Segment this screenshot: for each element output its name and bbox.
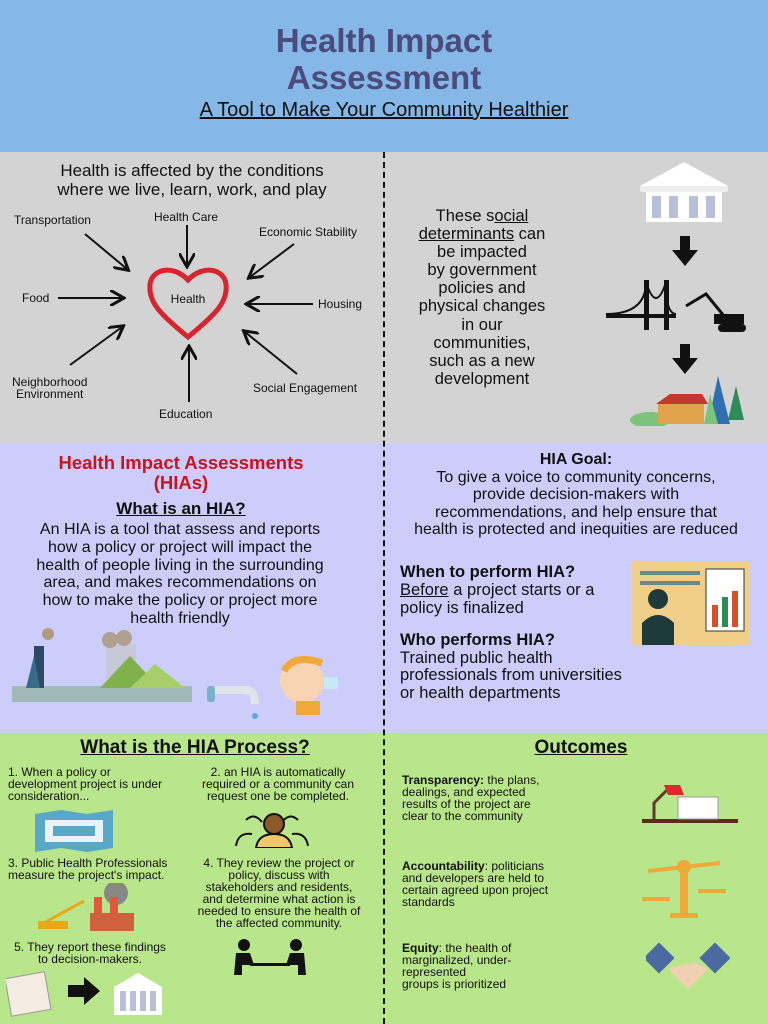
panel: what is HIA bbox=[0, 443, 768, 733]
text: who performs: Trained public health bbox=[400, 648, 553, 666]
arrow down 1 bbox=[672, 236, 698, 266]
text: HIA definition: how to make the policy or project more bbox=[43, 592, 317, 609]
text: social determinants: such as a new bbox=[429, 352, 535, 370]
text: HIA definition: area, and makes recommendations on bbox=[43, 574, 317, 591]
panel: social determinants bbox=[0, 152, 768, 443]
title: Health Impact bbox=[276, 22, 492, 59]
diagram: determinants around heart: Education bbox=[159, 407, 212, 421]
diagram: determinants around heart: Housing bbox=[318, 297, 362, 311]
text: HIA definition: An HIA is a tool that assess and reports bbox=[40, 521, 320, 538]
heading: outcomes: Outcomes bbox=[535, 737, 627, 758]
step 3 bbox=[8, 856, 167, 882]
diagram: determinants around heart: Economic Stability bbox=[259, 225, 357, 239]
outcome: transparency: Transparency: the plans, bbox=[402, 773, 539, 787]
text: HIA definition bbox=[36, 521, 324, 627]
icon: community group bbox=[235, 813, 309, 848]
outcome: accountability: certain agreed upon project bbox=[402, 883, 548, 897]
step 4: the affected community. bbox=[216, 916, 342, 930]
step 4: policy, discuss with bbox=[228, 868, 330, 882]
text: who performs: Who performs HIA? bbox=[400, 631, 555, 649]
heading: HIA goal: provide decision-makers with bbox=[473, 486, 679, 503]
step 1: 1. When a policy or bbox=[8, 765, 111, 779]
icon: faucet bbox=[207, 686, 259, 719]
text: social determinants: be impacted bbox=[437, 243, 527, 261]
heading: health affected bbox=[57, 161, 327, 199]
heading: health affected: where we live, learn, work, and play bbox=[57, 180, 327, 199]
outcome: accountability: and developers are held to bbox=[402, 871, 544, 885]
icon: presenter with chart bbox=[632, 561, 750, 645]
heading: HIAs bbox=[58, 452, 304, 493]
diagram: determinants around heart bbox=[12, 210, 362, 421]
step 3: 3. Public Health Professionals bbox=[8, 856, 167, 870]
text: social determinants: determinants can bbox=[419, 225, 545, 243]
step 1: development project is under bbox=[8, 777, 162, 791]
outcome: transparency bbox=[402, 773, 539, 823]
text: when to perform bbox=[400, 563, 594, 617]
outcome: equity: groups is prioritized bbox=[402, 977, 506, 991]
diagram: determinants around heart: Environment bbox=[16, 387, 84, 401]
text: social determinants bbox=[418, 207, 545, 388]
heading: HIA goal: recommendations, and help ensure that bbox=[435, 504, 717, 520]
step 4: needed to ensure the health of bbox=[198, 904, 360, 918]
icon: report arrow building bbox=[6, 971, 162, 1017]
step 2 bbox=[202, 765, 354, 803]
icon: house and trees bbox=[630, 376, 744, 426]
step 5: to decision-makers. bbox=[38, 952, 142, 966]
icon: scales bbox=[642, 860, 726, 918]
diagram: determinants around heart: Health bbox=[171, 292, 205, 306]
step 1: consideration... bbox=[8, 789, 89, 803]
icon: meeting bbox=[234, 939, 306, 975]
text: HIA definition: how a policy or project will impact the bbox=[48, 539, 312, 556]
icon: polluted landscape bbox=[12, 628, 192, 702]
outcome: equity: Equity: the health of bbox=[402, 941, 511, 955]
heading: HIA goal: health is protected and inequities are reduced bbox=[414, 521, 738, 538]
diagram: determinants around heart: Food bbox=[22, 291, 49, 305]
step 3: measure the project's impact. bbox=[8, 868, 164, 882]
outcome: transparency: results of the project are bbox=[402, 797, 531, 811]
subtitle: A Tool to Make Your Community Healthier bbox=[200, 99, 568, 121]
text: when to perform: policy is finalized bbox=[400, 599, 524, 617]
step 4: 4. They review the project or bbox=[203, 856, 355, 870]
step 4: and determine what action is bbox=[203, 892, 355, 906]
step 2: 2. an HIA is automatically bbox=[211, 765, 345, 779]
diagram: determinants around heart: Social Engagement bbox=[253, 381, 358, 395]
text: who performs: professionals from universities bbox=[400, 666, 622, 684]
heading: HIAs: Health Impact Assessments bbox=[58, 452, 304, 473]
heading: HIAs: (HIAs) bbox=[154, 472, 208, 493]
title bbox=[276, 22, 492, 96]
header band bbox=[0, 0, 768, 152]
outcome: accountability: standards bbox=[402, 895, 455, 909]
step 5 bbox=[14, 940, 166, 966]
outcome: accountability: Accountability: politicians bbox=[402, 859, 544, 873]
title: Assessment bbox=[287, 59, 481, 96]
arrow down 2 bbox=[672, 344, 698, 374]
outcome: transparency: dealings, and expected bbox=[402, 785, 525, 799]
icon: handshake bbox=[646, 943, 730, 989]
text: social determinants: These social bbox=[436, 207, 528, 225]
text: who performs bbox=[400, 631, 622, 702]
heading: health affected: Health is affected by the conditions bbox=[60, 161, 324, 180]
heading: HIA goal: To give a voice to community concerns, bbox=[436, 468, 716, 486]
outcome: equity: marginalized, under- bbox=[402, 953, 511, 967]
step 4: stakeholders and residents, bbox=[206, 880, 352, 894]
outcome: transparency: clear to the community bbox=[402, 809, 523, 823]
text: HIA definition: health friendly bbox=[130, 610, 230, 627]
icon: government building bbox=[640, 162, 728, 222]
outcome: equity bbox=[402, 941, 512, 991]
outcome: equity: represented bbox=[402, 965, 466, 979]
diagram: determinants around heart: Neighborhood bbox=[12, 375, 87, 389]
step 4 bbox=[198, 856, 360, 930]
diagram: determinants around heart: Transportation bbox=[14, 213, 91, 227]
text: when to perform: When to perform HIA? bbox=[400, 563, 575, 581]
icon: lamp and laptop bbox=[642, 785, 738, 823]
text: social determinants: physical changes bbox=[419, 297, 545, 315]
step 2: request one be completed. bbox=[207, 789, 349, 803]
outcome: accountability bbox=[402, 859, 548, 909]
icon: bridge and excavator bbox=[606, 280, 746, 332]
step 5: 5. They report these findings bbox=[14, 940, 166, 954]
icon: map bbox=[35, 810, 113, 852]
heading: HIA goal: HIA Goal: bbox=[540, 451, 612, 468]
text: who performs: or health departments bbox=[400, 684, 561, 702]
text: social determinants: by government bbox=[427, 261, 537, 279]
heading: HIA goal bbox=[414, 451, 738, 538]
heading: process: What is the HIA Process? bbox=[80, 737, 310, 758]
text: when to perform: Before a project starts or a bbox=[400, 581, 594, 599]
icon: person drinking bbox=[280, 656, 338, 715]
diagram: determinants around heart: Health Care bbox=[154, 210, 218, 224]
subheading: what is an HIA: What is an HIA? bbox=[116, 499, 246, 518]
step 2: required or a community can bbox=[202, 777, 354, 791]
text: social determinants: development bbox=[435, 370, 529, 388]
text: HIA definition: health of people living in the surrounding bbox=[36, 557, 324, 574]
vertical dashed divider bbox=[383, 152, 385, 1024]
text: social determinants: policies and bbox=[438, 279, 526, 297]
step 1 bbox=[8, 765, 162, 803]
panel: HIA process bbox=[0, 733, 768, 1024]
icon: crane and factory bbox=[38, 883, 134, 931]
text: social determinants: communities, bbox=[433, 334, 531, 352]
text: social determinants: in our bbox=[461, 316, 503, 334]
